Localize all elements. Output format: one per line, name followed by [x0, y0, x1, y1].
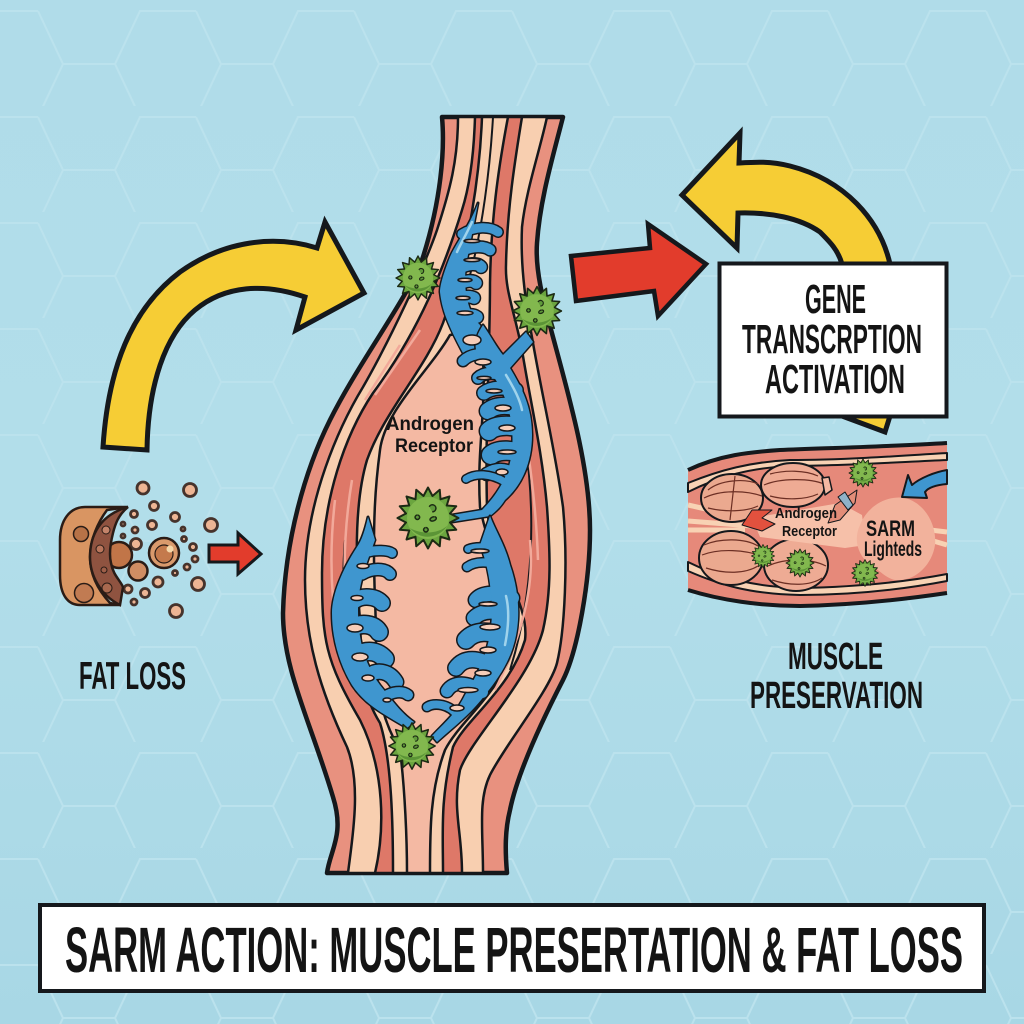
- icon: germ top left: [396, 256, 440, 300]
- icon: blue helix, lower right strand: [427, 516, 518, 742]
- arrow: yellow curved arrow left: [103, 222, 364, 450]
- label: muscle preservation: MUSCLE: [788, 636, 883, 678]
- label: androgen receptor in panel: Androgen: [775, 505, 837, 522]
- arrow: yellow curved arrow right: [682, 133, 890, 432]
- label: muscle preservation: [750, 636, 923, 717]
- icon: blue helix, middle strand: [452, 325, 533, 522]
- text box: gene transcription activation: [720, 264, 946, 416]
- icon: germ centre: [398, 488, 458, 548]
- arrow: red arrow centre: [571, 224, 706, 316]
- label: SARM Lighteds: [864, 516, 922, 561]
- icon: helix gaps: [347, 239, 516, 711]
- icon: germ top right: [513, 287, 561, 335]
- text box: gene transcription activation: GENE: [805, 276, 866, 322]
- icon: germ bottom: [389, 723, 435, 769]
- icon: germs in muscle panel: [751, 459, 878, 586]
- icon: central muscle fibre bundle: [283, 117, 590, 873]
- icon: blue helix, lower left strand: [332, 517, 414, 728]
- label: Androgen Receptor: Androgen: [386, 414, 474, 435]
- panel: muscle cross-section: [688, 443, 947, 606]
- text box: gene transcription activation: ACTIVATION: [765, 356, 905, 402]
- label: androgen receptor in panel: Receptor: [782, 523, 837, 540]
- arrow: small red arrow: [209, 533, 261, 574]
- icon: fat cell releasing droplets: [60, 482, 218, 618]
- label: SARM Lighteds: SARM: [866, 516, 915, 541]
- icon: blue helix, upper strand: [440, 203, 498, 353]
- label: SARM Lighteds: Lighteds: [864, 538, 922, 561]
- label: androgen receptor in panel: [775, 505, 837, 540]
- label: Androgen Receptor: [386, 414, 474, 457]
- label: fat loss: FAT LOSS: [79, 655, 186, 698]
- label: Androgen Receptor: Receptor: [395, 436, 474, 457]
